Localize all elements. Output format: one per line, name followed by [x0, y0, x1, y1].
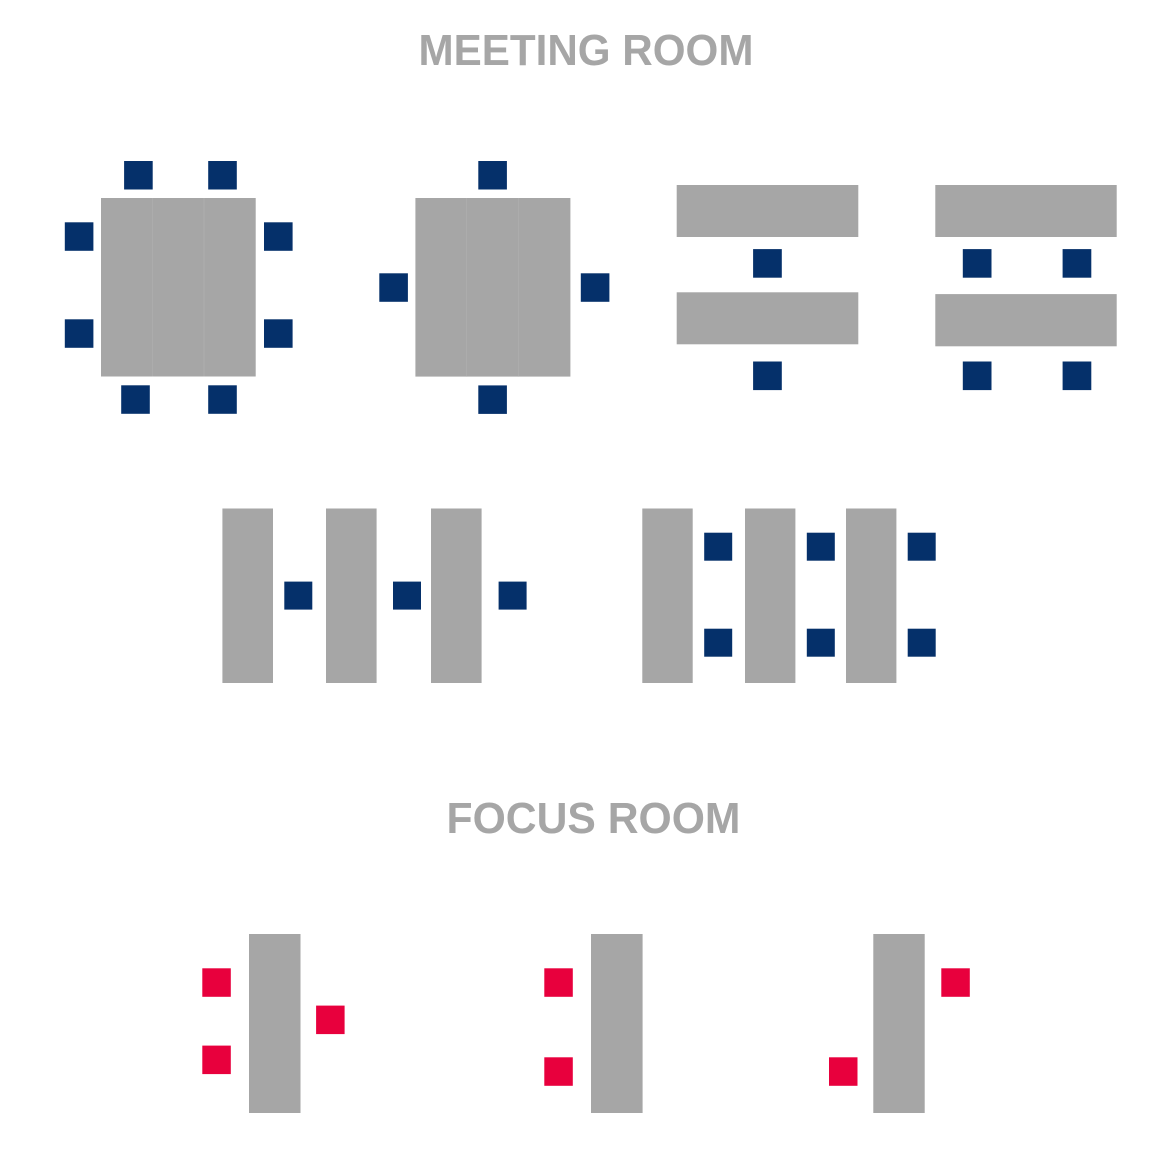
layout: three vertical tables with three seats	[222, 508, 527, 683]
layout: focus table with two seats on one side	[544, 934, 643, 1113]
layout: three vertical tables with six seats	[642, 508, 936, 683]
title: focus room: FOCUS ROOM	[446, 795, 740, 843]
layout: focus table with two opposing seats	[829, 934, 970, 1113]
layout: boardroom with eight seats	[65, 161, 293, 414]
layout: boardroom with four seats	[379, 161, 609, 414]
layout: two horizontal tables with four seats	[935, 185, 1117, 390]
layout: focus table with three seats	[202, 934, 345, 1113]
layout: two horizontal tables with two seats	[677, 185, 858, 390]
title: meeting room: MEETING ROOM	[418, 27, 754, 75]
